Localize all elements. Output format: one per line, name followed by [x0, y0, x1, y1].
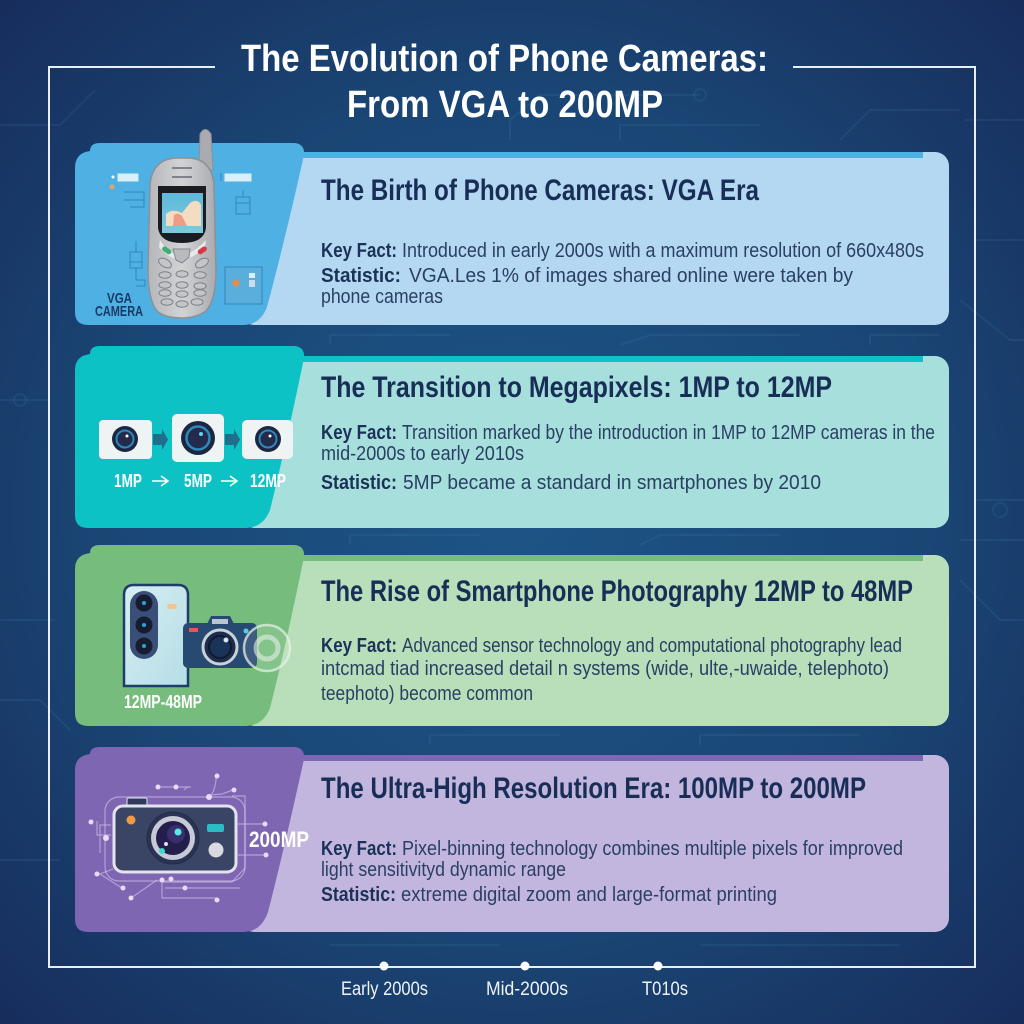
frame — [49, 67, 975, 967]
heading: The Transition to Megapixels: 1MP to 12MP — [321, 371, 832, 404]
text block: Statistic: — [321, 472, 397, 494]
icon: feature phone — [148, 130, 216, 318]
top strip — [300, 152, 923, 158]
text block: Key Fact: — [321, 635, 397, 657]
labels: megapixel steps: 5MP — [184, 471, 212, 491]
title: From VGA to 200MP — [347, 84, 663, 126]
text block: extreme digital zoom and large-format printing — [401, 884, 777, 906]
text block: Key Fact: — [321, 240, 397, 262]
card body — [240, 555, 949, 726]
icon: smartphone and camera — [124, 585, 290, 686]
top strip — [300, 555, 923, 561]
text block: mid-2000s to early 2010s — [321, 443, 524, 465]
card body — [240, 356, 949, 528]
timeline — [341, 962, 688, 1000]
label: VGA camera: CAMERA — [95, 303, 143, 320]
top strip — [300, 356, 923, 362]
labels: megapixel steps — [114, 471, 286, 491]
tab shape — [75, 143, 304, 325]
text block: Key Fact: — [321, 838, 397, 860]
text block: phone cameras — [321, 286, 443, 308]
tab shape — [75, 346, 304, 528]
text block — [321, 240, 924, 308]
text block: light sensitivityd dynamic range — [321, 859, 566, 881]
text block: Introduced in early 2000s with a maximum resolution of 660x480s — [402, 240, 924, 262]
top strip — [300, 755, 923, 761]
text block: Pixel-binning technology combines multiple pixels for improved — [402, 838, 903, 860]
panel: VGA era — [75, 130, 949, 325]
icon: camera progression — [99, 414, 293, 462]
text block — [321, 838, 903, 906]
text block: Transition marked by the introduction in 1MP to 12MP cameras in the — [402, 422, 935, 444]
text block: Statistic: — [321, 884, 396, 906]
title: The Evolution of Phone Cameras: — [241, 38, 768, 80]
title — [241, 38, 768, 126]
panel: megapixels — [75, 346, 949, 528]
tab shape — [75, 747, 304, 932]
icon: camera with circuit traces — [88, 774, 268, 902]
timeline: T010s — [642, 979, 688, 1000]
text block: 5MP became a standard in smartphones by 2010 — [403, 472, 821, 494]
label: range: 12MP-48MP — [124, 692, 202, 712]
text block: Statistic: — [321, 265, 401, 287]
label: VGA camera — [95, 290, 143, 320]
labels: megapixel steps: 1MP — [114, 471, 142, 491]
text block: intcmad tiad increased detail n systems (wide, ulte,-uwaide, telephoto) — [321, 658, 889, 680]
heading: The Birth of Phone Cameras: VGA Era — [321, 174, 759, 207]
panel: smartphone photography — [75, 545, 949, 726]
labels: megapixel steps: 12MP — [250, 471, 286, 491]
text block: Advanced sensor technology and computational photography lead — [402, 635, 902, 657]
card body — [240, 755, 949, 932]
label: 200MP: 200MP — [249, 827, 309, 852]
card body — [240, 152, 949, 325]
panel: ultra-high resolution — [75, 747, 949, 932]
text block: Key Fact: — [321, 422, 397, 444]
timeline: Mid-2000s — [486, 979, 568, 1000]
label: VGA camera: VGA — [107, 290, 132, 307]
text block: teephoto) become common — [321, 683, 533, 705]
timeline: Early 2000s — [341, 979, 428, 1000]
icon: schematic callouts — [110, 173, 262, 304]
tab shape — [75, 545, 304, 726]
heading: The Ultra-High Resolution Era: 100MP to 200MP — [321, 772, 866, 805]
text block — [321, 635, 902, 705]
text block: VGA.Les 1% of images shared online were taken by — [409, 265, 853, 287]
text block — [321, 422, 935, 494]
